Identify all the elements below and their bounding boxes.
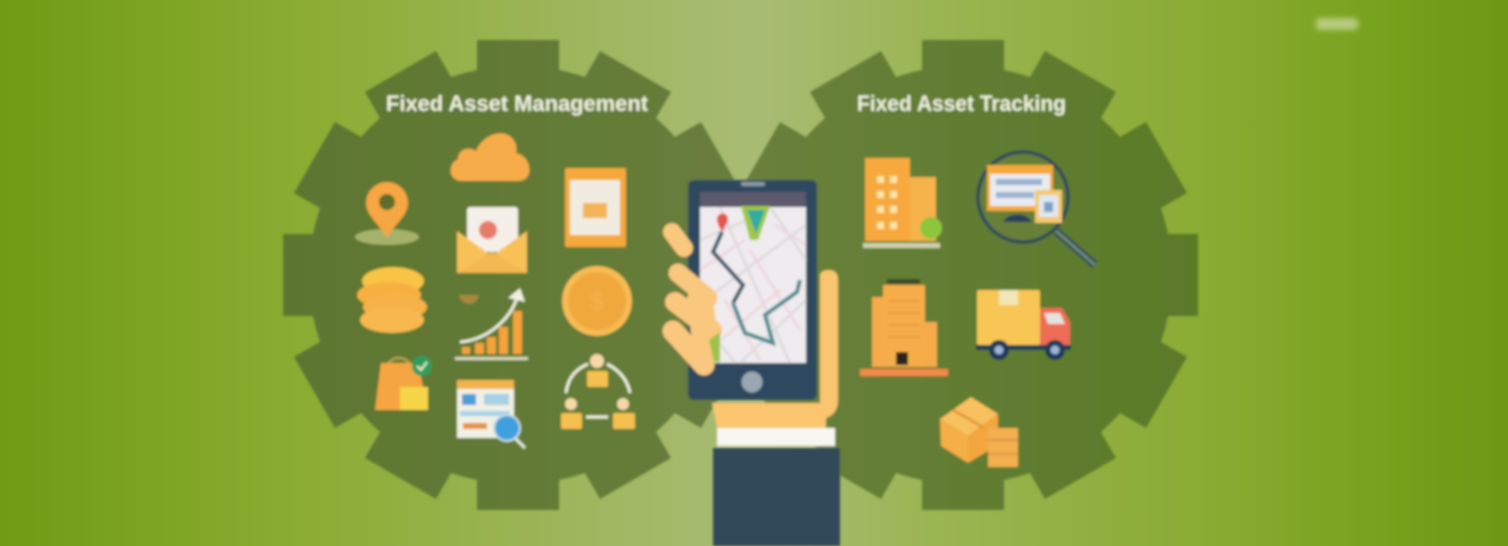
map route — [713, 232, 743, 303]
map streets — [700, 207, 806, 363]
icon: growth chart — [455, 288, 528, 360]
phone — [688, 180, 817, 400]
teal navigation core — [747, 210, 765, 234]
map route teal section — [733, 280, 800, 343]
red map pin — [717, 214, 728, 232]
top-right faint watermark — [1316, 18, 1358, 30]
icon: browser with magnifier — [457, 380, 525, 448]
icon: magnifier over devices — [978, 152, 1095, 265]
gear: fixed asset tracking — [727, 40, 1199, 510]
icon: large coin: $ — [590, 288, 604, 316]
icon: office building — [863, 158, 942, 248]
gear: fixed asset management — [283, 40, 753, 510]
icon: large coin — [562, 266, 632, 336]
home button — [742, 372, 762, 392]
icon: team network — [561, 354, 635, 429]
icon: tower building — [860, 279, 948, 376]
map minor pink streets — [700, 225, 806, 360]
green cuff highlight — [709, 332, 720, 362]
green navigation marker — [741, 206, 770, 240]
shirt cuff — [717, 428, 835, 446]
icon: delivery truck — [976, 290, 1071, 360]
artwork group — [283, 40, 1199, 546]
speaker — [741, 182, 765, 186]
icon: coin stack — [357, 267, 427, 333]
icon: email envelope — [457, 207, 527, 273]
heading: fixed asset tracking: Fixed Asset Tracking — [857, 91, 1066, 116]
icon: location pin — [355, 182, 419, 245]
icon: tablet — [565, 168, 626, 247]
hand palm behind phone — [712, 270, 838, 428]
icon: cardboard boxes — [940, 397, 1018, 467]
suit sleeve — [713, 448, 840, 546]
hand fingers — [672, 232, 712, 365]
heading: fixed asset management: Fixed Asset Management — [386, 91, 649, 116]
icon: shopping bag — [375, 356, 432, 410]
icon: cloud — [451, 133, 529, 181]
